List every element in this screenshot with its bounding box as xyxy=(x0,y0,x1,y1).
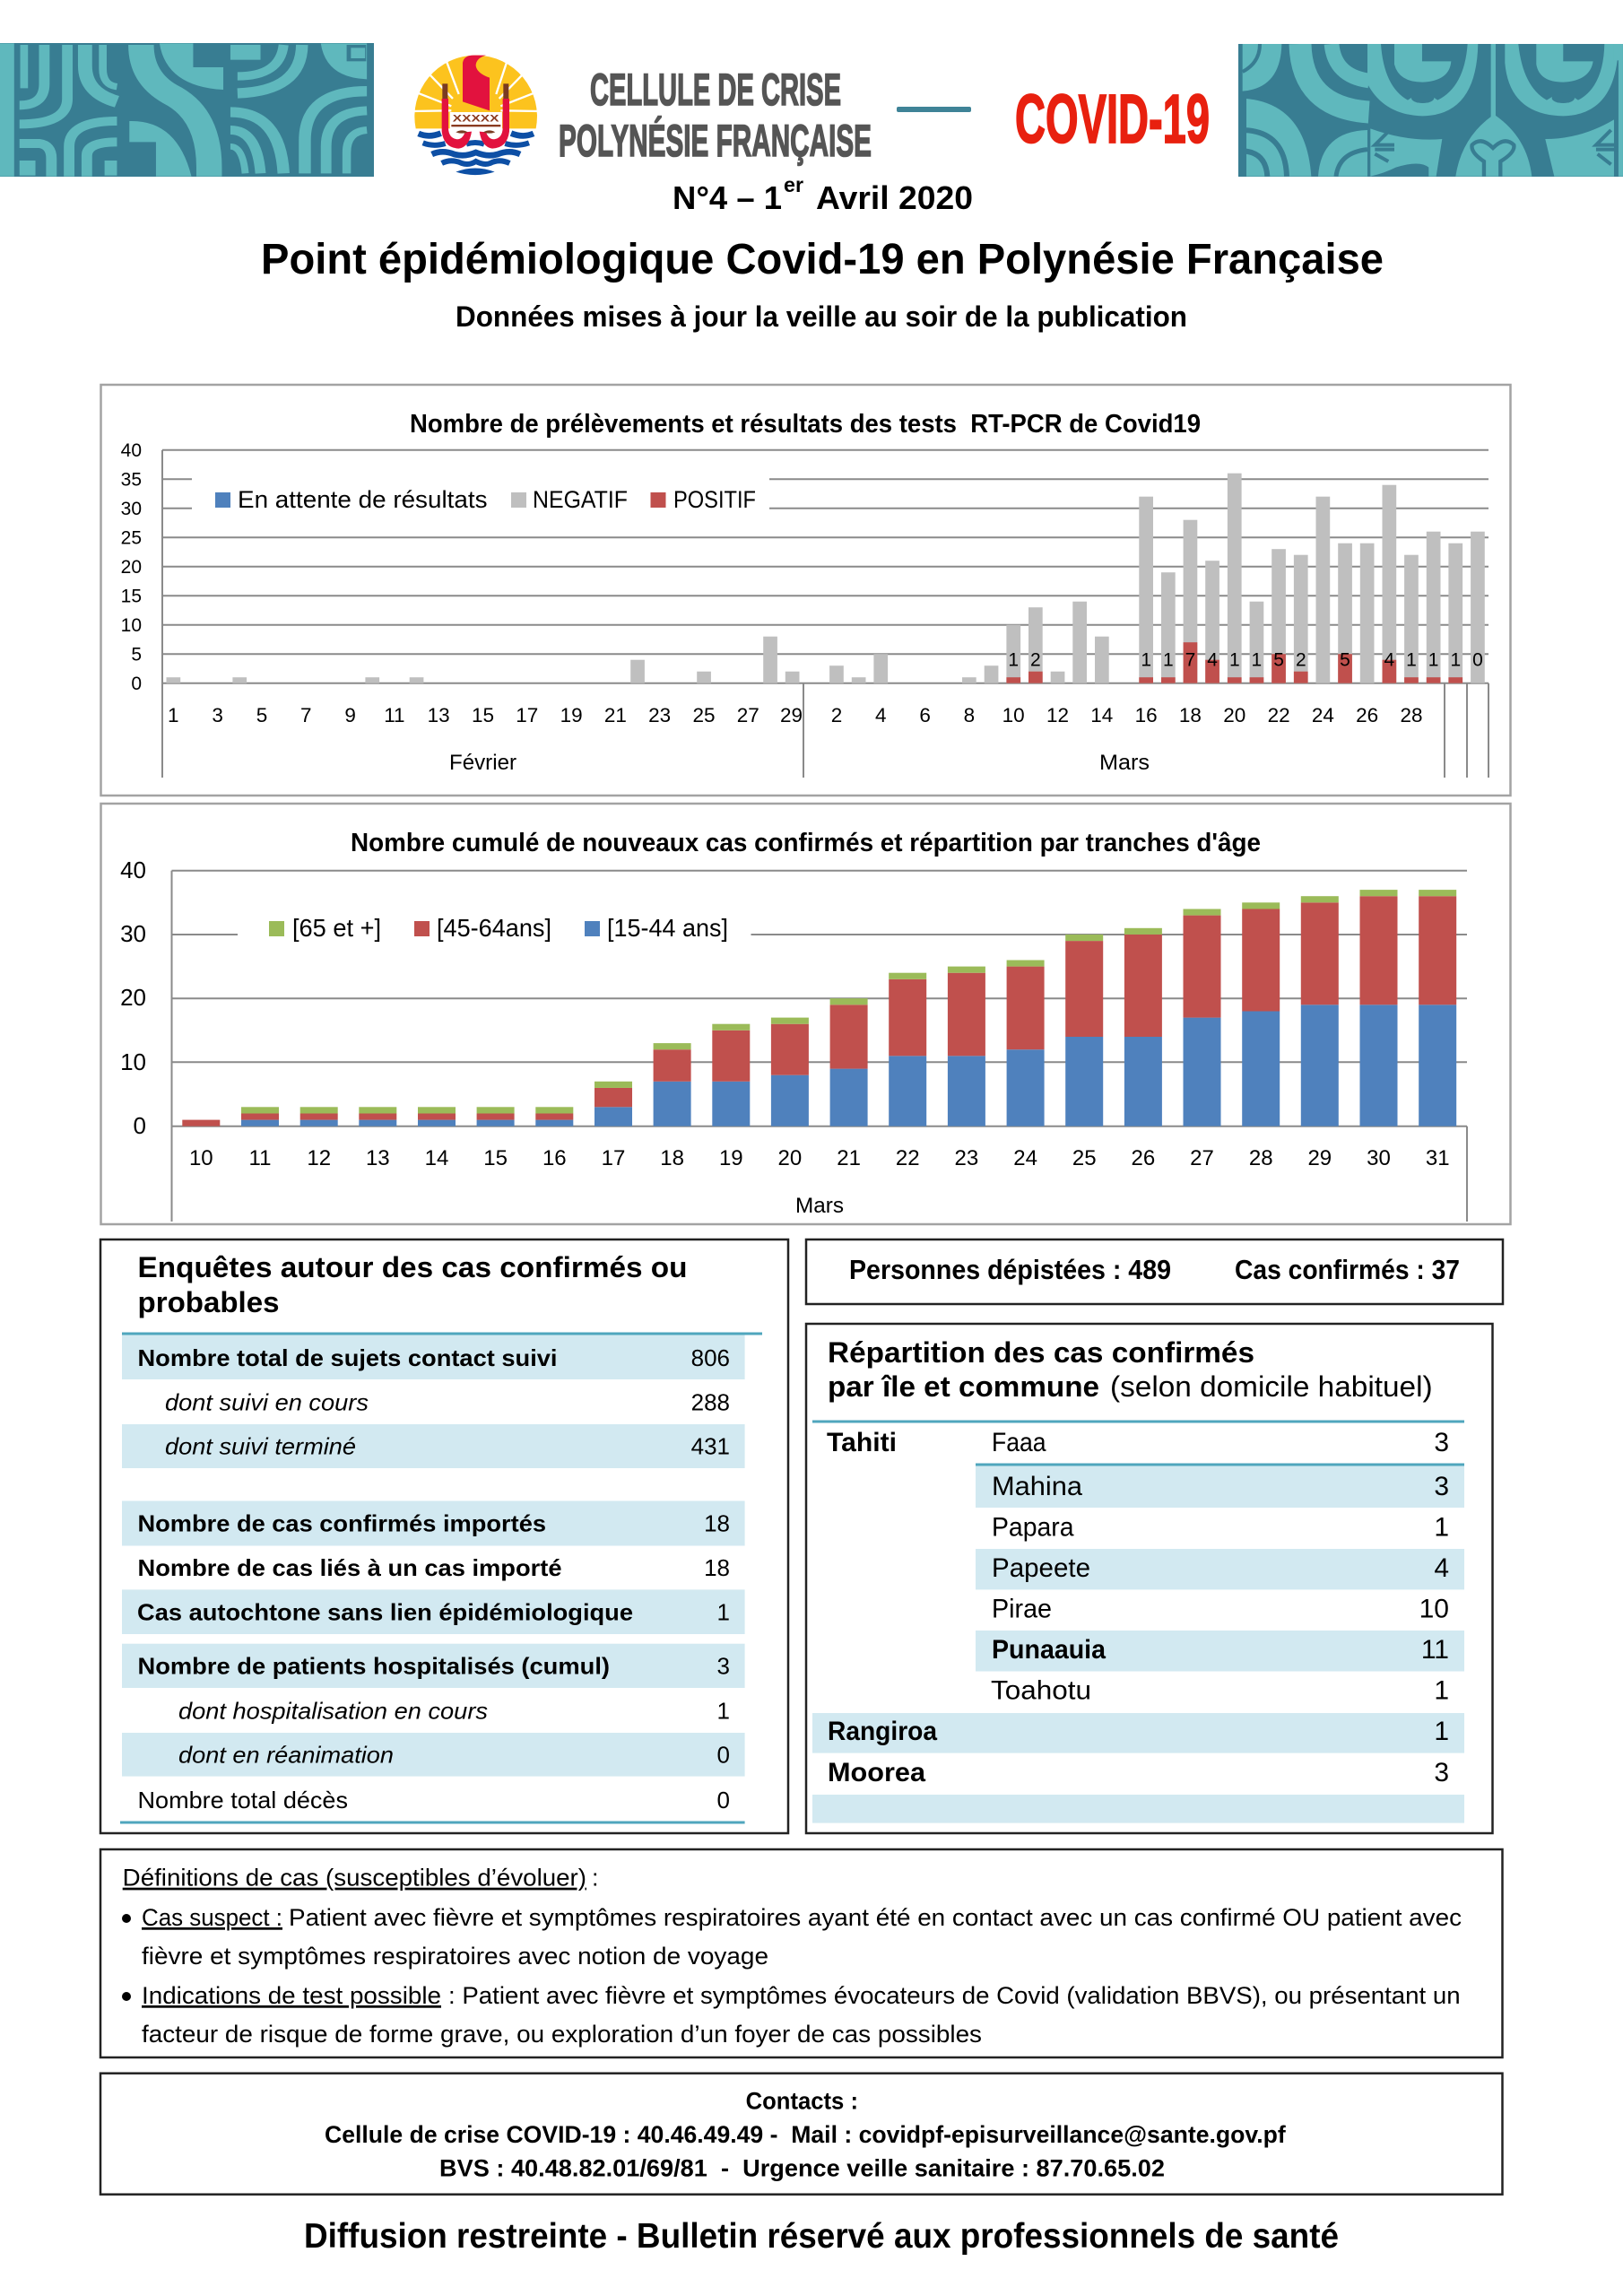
month label: Mars: Mars xyxy=(1099,751,1150,775)
table row: ongoing follow-up xyxy=(165,1388,730,1415)
row: Faaa: 3 xyxy=(1434,1428,1449,1457)
x axis day labels: 16 xyxy=(1135,704,1158,726)
row: Mahina: Mahina xyxy=(992,1472,1082,1501)
table row: total contacts: 806 xyxy=(691,1344,730,1371)
positive value labels: 1 xyxy=(1008,649,1019,671)
x axis day labels: 14 xyxy=(425,1146,448,1170)
positive value labels: 1 xyxy=(1406,649,1417,671)
table row: linked cases: 18 xyxy=(704,1554,730,1581)
definition: test indications: Indications de test possible xyxy=(142,1982,441,2009)
gridlines and axes xyxy=(162,450,1488,778)
y axis labels: 40 xyxy=(120,857,146,883)
x axis day labels: 13 xyxy=(366,1146,390,1170)
panel: contacts xyxy=(100,2074,1503,2195)
panel: investigations around cases xyxy=(100,1239,788,1833)
positive value labels: 2 xyxy=(1030,649,1041,671)
x axis day labels xyxy=(168,704,1423,726)
y axis labels: 40 xyxy=(121,440,142,461)
definitions heading: : xyxy=(592,1865,599,1892)
y axis labels: 10 xyxy=(121,615,142,636)
x axis day labels: 9 xyxy=(344,704,356,726)
row: Toahotu: Toahotu xyxy=(991,1676,1091,1706)
panel heading: par île et commune xyxy=(828,1370,1099,1403)
row: Punaauia xyxy=(992,1635,1449,1665)
island label: Tahiti: Tahiti xyxy=(827,1428,897,1457)
icon: French Polynesia coat of arms xyxy=(412,56,539,175)
header banner: left Polynesian pattern xyxy=(0,43,374,177)
x axis day labels: 15 xyxy=(483,1146,508,1170)
row: Moorea xyxy=(828,1758,1449,1787)
row: Rangiroa: 1 xyxy=(1434,1717,1449,1746)
header title: Cellule de crise: CELLULE DE CRISE xyxy=(590,65,841,115)
y axis labels: 20 xyxy=(121,557,142,578)
y axis labels: 25 xyxy=(121,527,142,549)
positive value labels: 7 xyxy=(1185,649,1195,671)
y axis labels xyxy=(120,857,146,1139)
positive value labels: 1 xyxy=(1450,649,1461,671)
definition: test indications xyxy=(122,1982,1461,2048)
table row: current hospitalisation: dont hospitalisation en cours xyxy=(178,1697,488,1724)
definitions heading: Définitions de cas (susceptibles d’évoluer) xyxy=(123,1865,586,1892)
month label: Mars: Mars xyxy=(795,1194,844,1218)
legend: [15-44 ans] xyxy=(607,914,728,942)
x axis day labels xyxy=(189,1146,1450,1170)
panel: cumulative cases stacked bar chart xyxy=(100,804,1510,1224)
x axis day labels: 23 xyxy=(648,704,671,726)
x axis day labels: 14 xyxy=(1090,704,1113,726)
definition: test indications: facteur de risque de forme grave, ou exploration d’un foyer de cas possibles xyxy=(142,2021,982,2048)
x axis day labels: 29 xyxy=(1307,1146,1332,1170)
x axis day labels: 26 xyxy=(1356,704,1378,726)
row: Rangiroa xyxy=(828,1717,1449,1746)
table row: completed follow-up xyxy=(165,1433,730,1460)
row: Mahina: 3 xyxy=(1434,1472,1449,1501)
positive test bars xyxy=(1006,642,1462,683)
x axis day labels: 19 xyxy=(560,704,583,726)
callout: screened and confirmed totals: Personnes dépistées : 489 xyxy=(849,1254,1171,1285)
x axis day labels: 18 xyxy=(1179,704,1202,726)
row: Punaauia: 11 xyxy=(1421,1635,1449,1665)
row: Papeete: Papeete xyxy=(992,1553,1090,1583)
x axis day labels: 8 xyxy=(964,704,975,726)
y axis labels xyxy=(121,440,142,694)
table row: hospitalised: 3 xyxy=(717,1652,730,1679)
table row: linked cases: Nombre de cas liés à un cas importé xyxy=(138,1554,561,1581)
table row: intensive care: 0 xyxy=(717,1741,730,1768)
x axis day labels: 31 xyxy=(1426,1146,1450,1170)
row: Toahotu: 1 xyxy=(1434,1676,1449,1706)
x axis day labels: 21 xyxy=(837,1146,861,1170)
negative test bars xyxy=(167,474,1485,683)
table row: imported cases xyxy=(138,1509,730,1536)
table row: total contacts: Nombre total de sujets contact suivi xyxy=(138,1344,558,1371)
table row: current hospitalisation xyxy=(178,1697,730,1724)
x axis day labels: 21 xyxy=(604,704,627,726)
positive value labels: 1 xyxy=(1141,649,1151,671)
row: Pirae: Pirae xyxy=(992,1595,1052,1624)
chart title: Nombre cumulé de nouveaux cas confirmés et répartition par tranches d'âge xyxy=(351,829,1261,857)
header dash xyxy=(897,107,971,112)
positive value labels: 1 xyxy=(1163,649,1174,671)
positive value labels xyxy=(1008,649,1483,671)
table row: intensive care: dont en réanimation xyxy=(178,1741,394,1768)
age group 65+ bars xyxy=(241,890,1456,1114)
legend xyxy=(269,914,728,942)
table row: imported cases: 18 xyxy=(704,1509,730,1536)
bulletin number and date: er xyxy=(784,173,803,196)
positive value labels: 1 xyxy=(1229,649,1240,671)
definition: suspect case: Cas suspect : xyxy=(142,1904,282,1931)
x axis day labels: 25 xyxy=(692,704,716,726)
row: Faaa: Faaa xyxy=(992,1428,1046,1457)
x axis day labels: 12 xyxy=(1046,704,1069,726)
y axis labels: 30 xyxy=(121,499,142,519)
x axis day labels: 27 xyxy=(737,704,759,726)
x axis day labels: 7 xyxy=(300,704,312,726)
row: Rangiroa: Rangiroa xyxy=(828,1717,937,1746)
main title: Point épidémiologique Covid-19 en Polynésie Française xyxy=(261,236,1384,283)
x axis day labels: 6 xyxy=(919,704,931,726)
row: Toahotu xyxy=(991,1676,1449,1706)
positive value labels: 1 xyxy=(1252,649,1262,671)
x axis day labels: 20 xyxy=(778,1146,802,1170)
row: Papara: 1 xyxy=(1434,1513,1449,1543)
bulletin number and date: Avril 2020 xyxy=(816,179,973,216)
row: Moorea: Moorea xyxy=(828,1758,925,1787)
icon: French Polynesia coat of arms: XXXXX xyxy=(453,114,499,125)
x axis day labels: 24 xyxy=(1013,1146,1037,1170)
x axis day labels: 17 xyxy=(516,704,538,726)
x axis day labels: 25 xyxy=(1072,1146,1097,1170)
y axis labels: 5 xyxy=(131,644,142,665)
row backgrounds xyxy=(122,1335,745,1777)
legend: POSITIF xyxy=(673,486,756,513)
x axis day labels: 10 xyxy=(1002,704,1025,726)
definition: suspect case: Patient avec fièvre et symptômes respiratoires ayant été en contact avec un cas confirmé OU patient avec xyxy=(289,1904,1462,1931)
y axis labels: 30 xyxy=(120,920,146,947)
panel heading: probables xyxy=(138,1286,280,1318)
age group 15-44 bars xyxy=(241,1004,1456,1126)
header title: Cellule de crise xyxy=(559,65,872,166)
x axis day labels: 2 xyxy=(831,704,842,726)
positive value labels: 0 xyxy=(1472,649,1483,671)
legend xyxy=(215,486,756,513)
bulletin number and date xyxy=(673,173,973,216)
row: Pirae: 10 xyxy=(1419,1595,1449,1624)
row: Pirae xyxy=(992,1595,1449,1624)
definition: suspect case xyxy=(122,1904,1462,1970)
x axis day labels: 26 xyxy=(1132,1146,1155,1170)
panel: case definitions xyxy=(100,1849,1503,2057)
panel heading xyxy=(828,1336,1433,1403)
header banner: right Polynesian pattern xyxy=(1238,44,1623,177)
x axis day labels: 17 xyxy=(602,1146,625,1170)
table row: completed follow-up: 431 xyxy=(691,1433,730,1460)
x axis day labels: 18 xyxy=(660,1146,684,1170)
x axis day labels: 13 xyxy=(428,704,450,726)
header label: COVID-19: COVID-19 xyxy=(1015,81,1210,158)
gridlines and axes xyxy=(172,871,1467,1222)
row: Faaa xyxy=(992,1428,1449,1457)
x axis day labels: 20 xyxy=(1223,704,1245,726)
y axis labels: 20 xyxy=(120,984,146,1011)
panel: tests bar chart xyxy=(100,385,1510,796)
table row: deaths: Nombre total décès xyxy=(138,1787,348,1813)
positive value labels: 1 xyxy=(1428,649,1438,671)
positive value labels: 2 xyxy=(1296,649,1306,671)
x axis day labels: 19 xyxy=(719,1146,743,1170)
x axis day labels: 22 xyxy=(896,1146,920,1170)
x axis day labels: 1 xyxy=(168,704,179,726)
panel heading: Répartition des cas confirmés xyxy=(828,1336,1254,1369)
table row: total contacts xyxy=(138,1344,730,1371)
definition: suspect case: fièvre et symptômes respiratoires avec notion de voyage xyxy=(142,1943,768,1970)
table row: deaths: 0 xyxy=(717,1787,730,1813)
row: Mahina xyxy=(992,1472,1449,1501)
bulletin number and date: N°4 – 1 xyxy=(673,179,782,216)
table row: ongoing follow-up: dont suivi en cours xyxy=(165,1388,369,1415)
y axis labels: 35 xyxy=(121,470,142,490)
table row: autochthonous cases: 1 xyxy=(717,1599,730,1626)
legend: [65 et +] xyxy=(292,914,381,942)
table row: completed follow-up: dont suivi terminé xyxy=(165,1433,356,1460)
y axis labels: 0 xyxy=(131,674,142,694)
y axis labels: 0 xyxy=(134,1112,146,1139)
panel heading xyxy=(138,1251,687,1318)
panel: contacts: Contacts : xyxy=(746,2088,858,2115)
row: Papeete: 4 xyxy=(1434,1553,1449,1583)
table row: linked cases xyxy=(138,1554,730,1581)
row: Punaauia: Punaauia xyxy=(992,1635,1106,1665)
panel heading: Enquêtes autour des cas confirmés ou xyxy=(138,1251,687,1283)
table row: ongoing follow-up: 288 xyxy=(691,1388,730,1415)
row: Moorea: 3 xyxy=(1434,1758,1449,1787)
x axis day labels: 4 xyxy=(875,704,887,726)
definition: test indications: : Patient avec fièvre et symptômes évocateurs de Covid (validation BBVS), ou présentant un xyxy=(448,1982,1461,2009)
x axis day labels: 29 xyxy=(780,704,803,726)
header title: Cellule de crise: POLYNÉSIE FRANÇAISE xyxy=(559,116,872,166)
chart title: Nombre de prélèvements et résultats des tests RT-PCR de Covid19 xyxy=(410,410,1201,439)
subtitle: Données mises à jour la veille au soir de la publication xyxy=(456,300,1187,333)
x axis day labels: 3 xyxy=(212,704,223,726)
x axis day labels: 28 xyxy=(1249,1146,1273,1170)
callout: screened and confirmed totals xyxy=(806,1239,1503,1304)
x axis day labels: 16 xyxy=(542,1146,567,1170)
table row: imported cases: Nombre de cas confirmés importés xyxy=(138,1509,546,1536)
month label: Février: Février xyxy=(449,751,516,775)
x axis day labels: 24 xyxy=(1312,704,1334,726)
positive value labels: 4 xyxy=(1207,649,1218,671)
panel: contacts: Cellule de crise COVID-19 : 40.46.49.49 - Mail : covidpf-episurveillance@sante.gov.pf xyxy=(325,2121,1287,2148)
row backgrounds xyxy=(812,1465,1464,1823)
footer notice: Diffusion restreinte - Bulletin réservé aux professionnels de santé xyxy=(304,2217,1339,2256)
panel heading: (selon domicile habituel) xyxy=(1110,1370,1433,1403)
x axis day labels: 11 xyxy=(249,1146,271,1170)
y axis labels: 10 xyxy=(120,1048,146,1075)
row: Papara: Papara xyxy=(992,1513,1074,1543)
x axis day labels: 12 xyxy=(307,1146,331,1170)
x axis day labels: 10 xyxy=(189,1146,213,1170)
age group 45-64 bars xyxy=(182,896,1456,1126)
table row: intensive care xyxy=(178,1741,730,1768)
x axis day labels: 28 xyxy=(1400,704,1423,726)
x axis day labels: 15 xyxy=(472,704,494,726)
row: Papara xyxy=(992,1513,1449,1543)
table row: current hospitalisation: 1 xyxy=(717,1697,730,1724)
x axis day labels: 22 xyxy=(1268,704,1290,726)
table row: autochthonous cases: Cas autochtone sans lien épidémiologique xyxy=(137,1599,633,1626)
y axis labels: 15 xyxy=(121,587,142,606)
callout: screened and confirmed totals: Cas confirmés : 37 xyxy=(1235,1254,1460,1285)
positive value labels: 4 xyxy=(1384,649,1394,671)
x axis day labels: 5 xyxy=(256,704,267,726)
table row: deaths xyxy=(138,1787,730,1813)
panel: contacts: BVS : 40.48.82.01/69/81 - Urgence veille sanitaire : 87.70.65.02 xyxy=(439,2155,1165,2182)
legend: NEGATIF xyxy=(533,486,628,513)
row: Papeete xyxy=(992,1553,1449,1583)
legend: En attente de résultats xyxy=(238,486,488,513)
panel: cases by island and commune xyxy=(806,1324,1492,1833)
x axis day labels: 11 xyxy=(384,704,405,726)
positive value labels: 5 xyxy=(1273,649,1284,671)
x axis day labels: 23 xyxy=(955,1146,978,1170)
x axis day labels: 30 xyxy=(1367,1146,1391,1170)
legend: [45-64ans] xyxy=(437,914,551,942)
table row: hospitalised: Nombre de patients hospitalisés (cumul) xyxy=(138,1652,610,1679)
positive value labels: 5 xyxy=(1340,649,1350,671)
x axis day labels: 27 xyxy=(1190,1146,1214,1170)
